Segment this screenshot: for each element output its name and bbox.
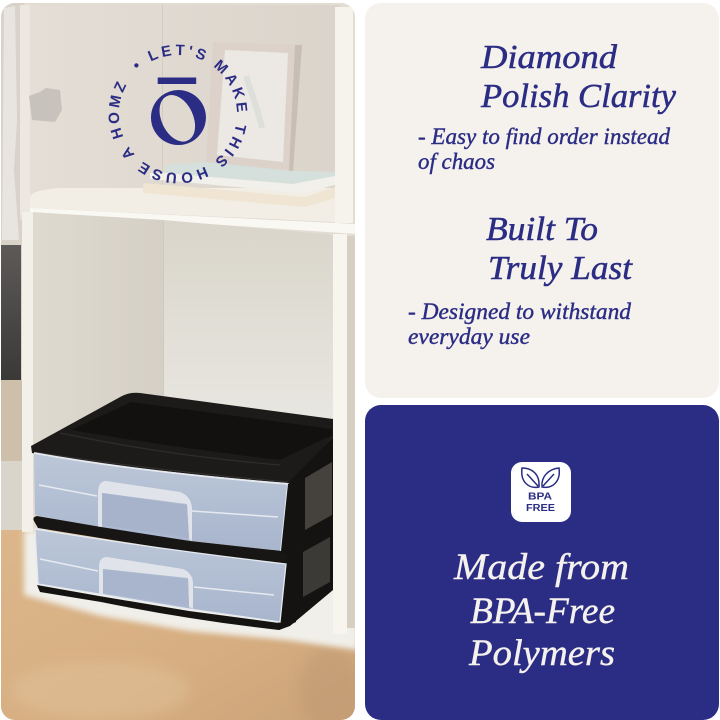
plastic drawer unit	[31, 393, 333, 630]
logo: circular badge	[108, 44, 248, 184]
heading: made from bpa-free polymers	[453, 547, 629, 674]
panel: product photo	[0, 0, 360, 720]
frame bottom	[37, 585, 279, 630]
top drawer	[34, 453, 288, 551]
frame top	[31, 393, 333, 483]
heading: made from bpa-free polymers: Polymers	[468, 633, 615, 674]
letter o mark	[151, 90, 206, 145]
heading: built to truly last	[486, 211, 634, 287]
side frame	[270, 437, 333, 630]
icon: bpa free leaf badge: FREE	[526, 502, 555, 514]
ring text: • LET'S MAKE THIS HOUSE A HOMZ	[108, 44, 248, 184]
stacked books	[143, 162, 335, 207]
shelf board	[30, 188, 356, 234]
upper shelf bay	[20, 5, 163, 220]
heading: diamond polish clarity: Diamond	[480, 39, 618, 76]
wall sticker smudge	[29, 88, 62, 122]
heading: built to truly last: Truly Last	[488, 250, 634, 287]
text: designed to withstand: - Designed to withstand	[408, 299, 631, 324]
top recess	[71, 402, 332, 460]
handle	[98, 481, 192, 541]
heading: made from bpa-free polymers: Made from	[453, 547, 629, 588]
divider rail	[33, 516, 288, 564]
side window upper	[305, 462, 332, 530]
heading: built to truly last: Built To	[486, 211, 598, 248]
text: designed to withstand: everyday use	[408, 324, 530, 349]
panel: bpa free	[365, 405, 719, 720]
left room strip	[0, 0, 25, 720]
floor	[0, 530, 356, 720]
side window lower	[303, 537, 330, 597]
icon: bpa free leaf badge	[511, 462, 571, 522]
text: easy to find order: - Easy to find order instead	[418, 124, 671, 149]
cabinet base	[24, 530, 358, 650]
heading: diamond polish clarity	[480, 39, 677, 115]
icon: bpa free leaf badge: BPA	[528, 490, 552, 502]
heading: made from bpa-free polymers: BPA-Free	[470, 591, 615, 632]
right post	[279, 484, 296, 630]
panel: features	[365, 3, 719, 398]
handle	[99, 557, 193, 609]
picture frame	[217, 45, 302, 171]
text: easy to find order	[418, 124, 671, 174]
lower shelf bay	[33, 212, 333, 419]
macron bar	[158, 78, 196, 84]
bottom drawer	[35, 529, 286, 622]
text: designed to withstand	[408, 299, 631, 349]
text: easy to find order: of chaos	[418, 149, 495, 174]
heading: diamond polish clarity: Polish Clarity	[480, 78, 677, 115]
cabinet uprights	[22, 7, 356, 634]
